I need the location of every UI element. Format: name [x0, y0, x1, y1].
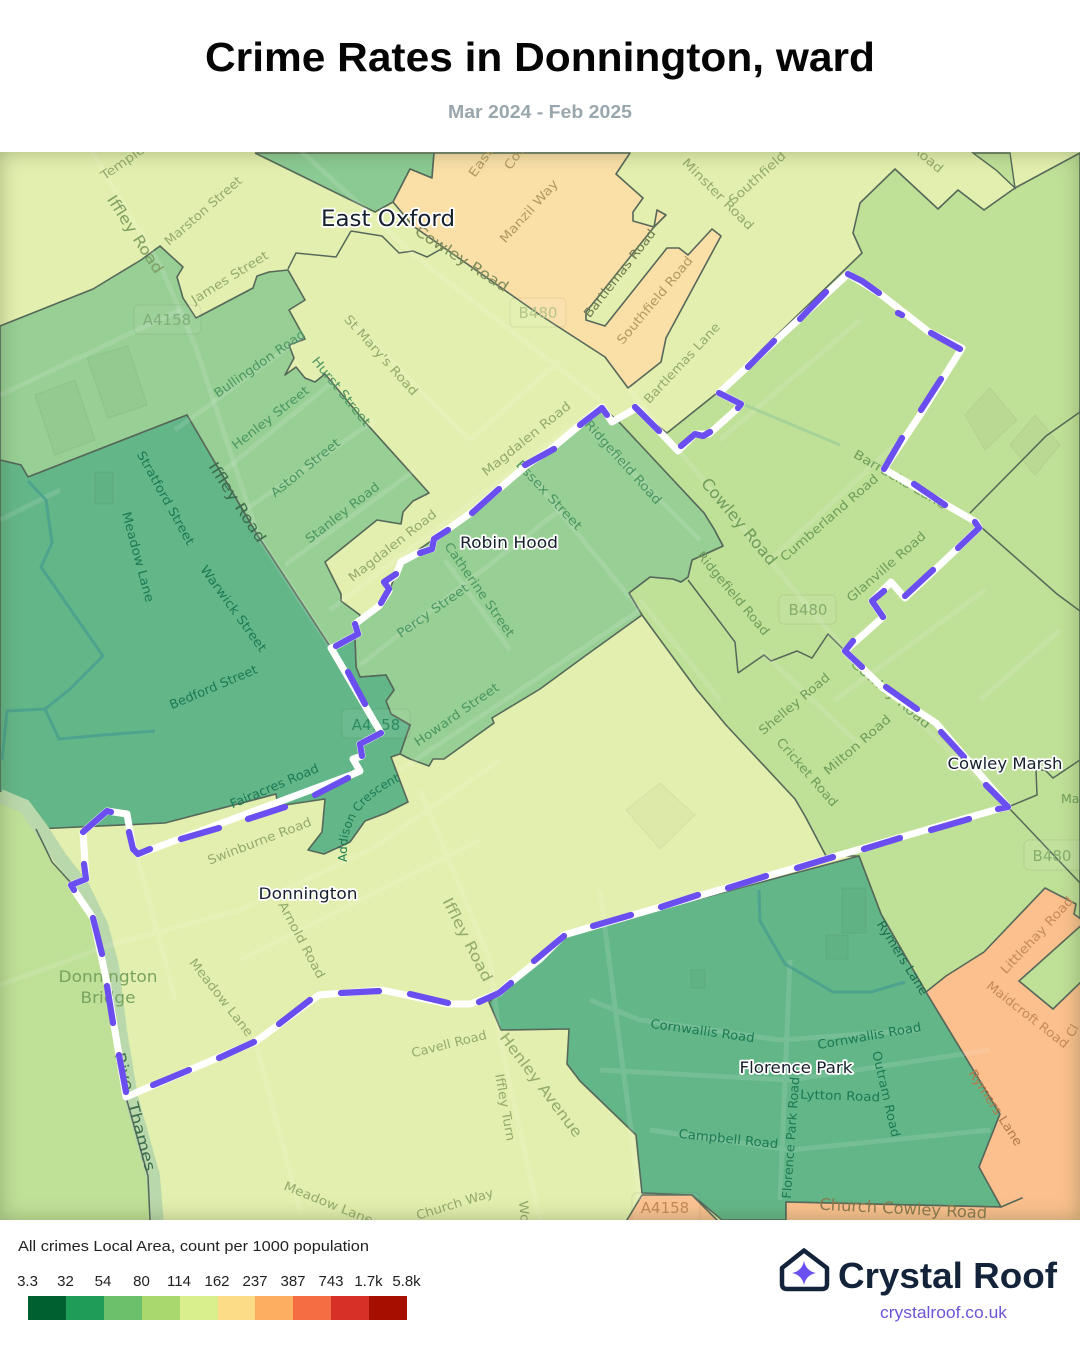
- road labels: dark green area: Campbell Road: [678, 1126, 779, 1151]
- region: dark green Florence Park: [489, 856, 1001, 1220]
- place label: Donnington Bridge: [58, 967, 158, 1007]
- shield: A4158 centre: [342, 709, 410, 738]
- road labels: pale area: Swinburne Road: [205, 814, 313, 868]
- road labels: pale area: [97, 141, 947, 1228]
- road labels: medium green area: Bullingdon Road: [211, 326, 308, 400]
- road labels: light green area: Ma: [1061, 791, 1079, 806]
- road labels: larger pale labels: Henley Avenue: [496, 1029, 586, 1141]
- legend scale values: 743: [318, 1273, 344, 1290]
- region: light green west of the Thames: [0, 792, 150, 1220]
- road labels: dark green area: Addison Crescent: [338, 774, 400, 862]
- road labels: medium green area: Hurst Street: [309, 353, 374, 429]
- shield: A4158 north: [134, 305, 201, 334]
- region: medium green Robin Hood: [355, 407, 723, 766]
- road labels: dark green area: Bedford Street: [167, 662, 260, 712]
- road labels: orange area: Rymers Lane: [966, 1067, 1026, 1149]
- inner ward boundary lines: [36, 231, 1080, 1220]
- road labels: pale area: Meadow Lane: [282, 1178, 376, 1228]
- road labels: pale area: Minster Road: [679, 155, 757, 233]
- map edge vignette: [0, 152, 1080, 1220]
- road labels: pale area: Magdalen Road: [479, 398, 574, 479]
- road labels: pale area: Church Way: [414, 1185, 496, 1223]
- road labels: pale orange area: Southfield Road: [613, 253, 696, 347]
- road labels: pale orange area: Cowley Road: [412, 222, 512, 296]
- road labels: pale area: Meadow Lane: [186, 955, 257, 1040]
- road labels: dark green area: Lytton Road: [800, 1087, 880, 1104]
- road labels: dark green area: Cornwallis Road: [650, 1016, 756, 1045]
- road labels: strong labels on boundaries: River Thames: [110, 1050, 159, 1173]
- legend colour scale: [28, 1296, 407, 1320]
- road labels: strong labels on boundaries: [110, 459, 270, 1173]
- road labels: medium green area: Howard Street: [411, 679, 502, 749]
- legend scale values: 80: [133, 1273, 150, 1290]
- place label: Donnington Bridge: Donnington: [58, 967, 158, 986]
- shield: B480 centre: [779, 595, 836, 624]
- road labels: light green area: Shelley Road: [756, 670, 833, 738]
- road labels: pale area: Iffley Turn: [492, 1072, 519, 1142]
- road labels: pale area: Bartlemas Lane: [640, 319, 723, 406]
- road labels: medium green area: Henley Street: [229, 383, 312, 452]
- road labels: medium green area: Ridgefield Road: [582, 417, 665, 507]
- region: small green corner at top right: [973, 153, 1015, 188]
- road labels: pale orange area: Bartlemas Road: [580, 226, 659, 320]
- logo wordmark: Crystal Roof: [838, 1255, 1058, 1296]
- road labels: dark green area: Meadow Lane: [119, 510, 158, 604]
- place label: Donnington Bridge: Bridge: [80, 988, 136, 1007]
- road labels: dark green area: [119, 408, 972, 1220]
- road labels: dark green area: Warwick Street: [197, 562, 270, 655]
- region: pale orange East Oxford: [393, 153, 721, 388]
- road labels: pale area: Road: [909, 141, 947, 176]
- shield: B480 east: [1024, 840, 1080, 870]
- road labels: medium green area: Stanley Road: [302, 479, 382, 546]
- road labels: dark green area: Stratford Street: [134, 448, 198, 547]
- road labels: medium green area: Catherine Street: [441, 539, 518, 640]
- place: Donnington: Donnington: [258, 884, 358, 903]
- road labels: pale area: Wo: [516, 1200, 533, 1223]
- shield: B480 east: B480: [1033, 847, 1071, 865]
- road labels: dark green area: Florence Park Road: [779, 1076, 802, 1199]
- road labels: pale area: James Street: [187, 247, 271, 307]
- place: Robin Hood: Robin Hood: [460, 533, 558, 552]
- road labels: medium green area: Essex Street: [513, 457, 586, 533]
- road labels: pale area: Arnold Road: [275, 899, 329, 981]
- river Thames: [0, 796, 157, 1225]
- road labels: pale area: St Mary's Road: [341, 312, 421, 398]
- shield: B480 north: B480: [519, 304, 557, 322]
- road labels: orange area: [819, 893, 1080, 1222]
- road number shields: [134, 298, 1080, 1222]
- road labels: light green area: [694, 446, 1079, 809]
- shield: A4158 centre: A4158: [352, 716, 400, 734]
- road labels: orange area: Littlehay Road: [997, 893, 1076, 977]
- road labels: medium green area: Percy Street: [394, 580, 471, 641]
- place labels: [258, 207, 1062, 1077]
- road labels: light green area: Cowley Road: [697, 474, 781, 569]
- shield: A4158 south: [632, 1193, 700, 1222]
- boundary white casing: [71, 274, 1008, 1097]
- region: light green notch: [1019, 922, 1080, 1009]
- road labels: pale orange area: Manzil Way: [496, 176, 561, 246]
- region: upper green sliver: [255, 153, 434, 212]
- road labels: dark green area: Fairacres Road: [228, 760, 321, 811]
- road labels: medium green area: Aston Street: [267, 435, 343, 500]
- road labels: light green area: Cricket Road: [774, 735, 841, 809]
- legend scale values: 387: [280, 1273, 306, 1290]
- shield: A4158 north: A4158: [143, 311, 191, 329]
- road labels: dark green area: Rymers Lane: [874, 918, 932, 998]
- legend scale values: 162: [204, 1273, 230, 1290]
- shield: B480 centre: B480: [789, 601, 827, 619]
- road network texture: [0, 150, 1060, 1220]
- streams: [2, 405, 905, 992]
- logo: Crystal Roof: [782, 1250, 1058, 1322]
- shield: B480 north: [510, 298, 566, 327]
- road labels: light green area: Milton Road: [820, 711, 894, 778]
- place: East Oxford: East Oxford: [321, 207, 455, 232]
- road labels: pale area: Marston Street: [161, 173, 245, 248]
- legend scale values: [17, 1273, 421, 1290]
- road labels: strong labels on boundaries: Iffley Road: [205, 459, 270, 546]
- road labels: pale area: Cavell Road: [410, 1027, 488, 1060]
- ward boundary: Donnington: [71, 274, 1008, 1097]
- road labels: dark green area: Outram Road: [869, 1049, 904, 1139]
- road labels: pale orange area: [412, 142, 696, 347]
- legend scale values: 1.7k: [354, 1273, 383, 1290]
- place: Cowley Marsh: Cowley Marsh: [948, 754, 1062, 773]
- road labels: light green area: Glanville Road: [843, 528, 929, 605]
- road labels: pale area: Magdalen Road: [345, 506, 439, 585]
- region: medium green west block: [0, 246, 429, 648]
- place: Florence Park: Florence Park: [740, 1058, 853, 1077]
- road labels: light green area: Cowley Road: [848, 656, 934, 731]
- shield: A4158 south: A4158: [641, 1199, 689, 1217]
- road labels: pale orange area: Cos: [501, 142, 528, 172]
- road labels: medium green area: [211, 326, 665, 749]
- legend scale values: 5.8k: [392, 1273, 421, 1290]
- road labels: orange area: Church Cowley Road: [819, 1195, 988, 1222]
- region: dark green Meadow Lane and Addison Crescent: [0, 415, 410, 854]
- road labels: light green area: Barracks Lane: [851, 446, 950, 512]
- region: large light green Cowley area: [617, 153, 1080, 1000]
- road labels: pale area: Southfield: [725, 148, 789, 207]
- road labels: orange area: Maidcroft Road: [984, 978, 1072, 1051]
- title: Crime Rates in Donnington, ward: [205, 34, 875, 80]
- legend scale values: 114: [167, 1273, 191, 1290]
- road labels: pale area: Temple: [97, 142, 147, 183]
- legend title: All crimes Local Area, count per 1000 population: [18, 1238, 369, 1255]
- region: orange strip south of Florence Park: [624, 1195, 722, 1225]
- road labels: dark green area: Cornwallis Road: [816, 1019, 922, 1052]
- road labels: larger pale labels: [103, 192, 586, 1141]
- road labels: pale orange area: East: [465, 145, 496, 180]
- legend scale values: 54: [95, 1273, 111, 1290]
- subtitle: date range: Mar 2024 - Feb 2025: [448, 102, 632, 122]
- legend scale values: 32: [57, 1273, 74, 1290]
- legend scale values: 237: [242, 1273, 268, 1290]
- base area: pale yellow-green: [0, 152, 1080, 1220]
- icon: purple star: [792, 1261, 816, 1285]
- icon: house outline: [782, 1250, 827, 1289]
- road labels: larger pale labels: Iffley Road: [103, 192, 167, 277]
- region: orange south-east: [786, 888, 1080, 1225]
- logo url: crystalroof.co.uk: [880, 1304, 1008, 1322]
- road labels: light green area: Ridgefield Road: [694, 548, 773, 638]
- road labels: larger pale labels: Iffley Road: [439, 895, 496, 985]
- boundary purple dashes: [71, 274, 1008, 1092]
- road labels: light green area: Cumberland Road: [777, 471, 881, 564]
- park and building patches: [35, 346, 1060, 988]
- legend scale values: 3.3: [17, 1273, 38, 1290]
